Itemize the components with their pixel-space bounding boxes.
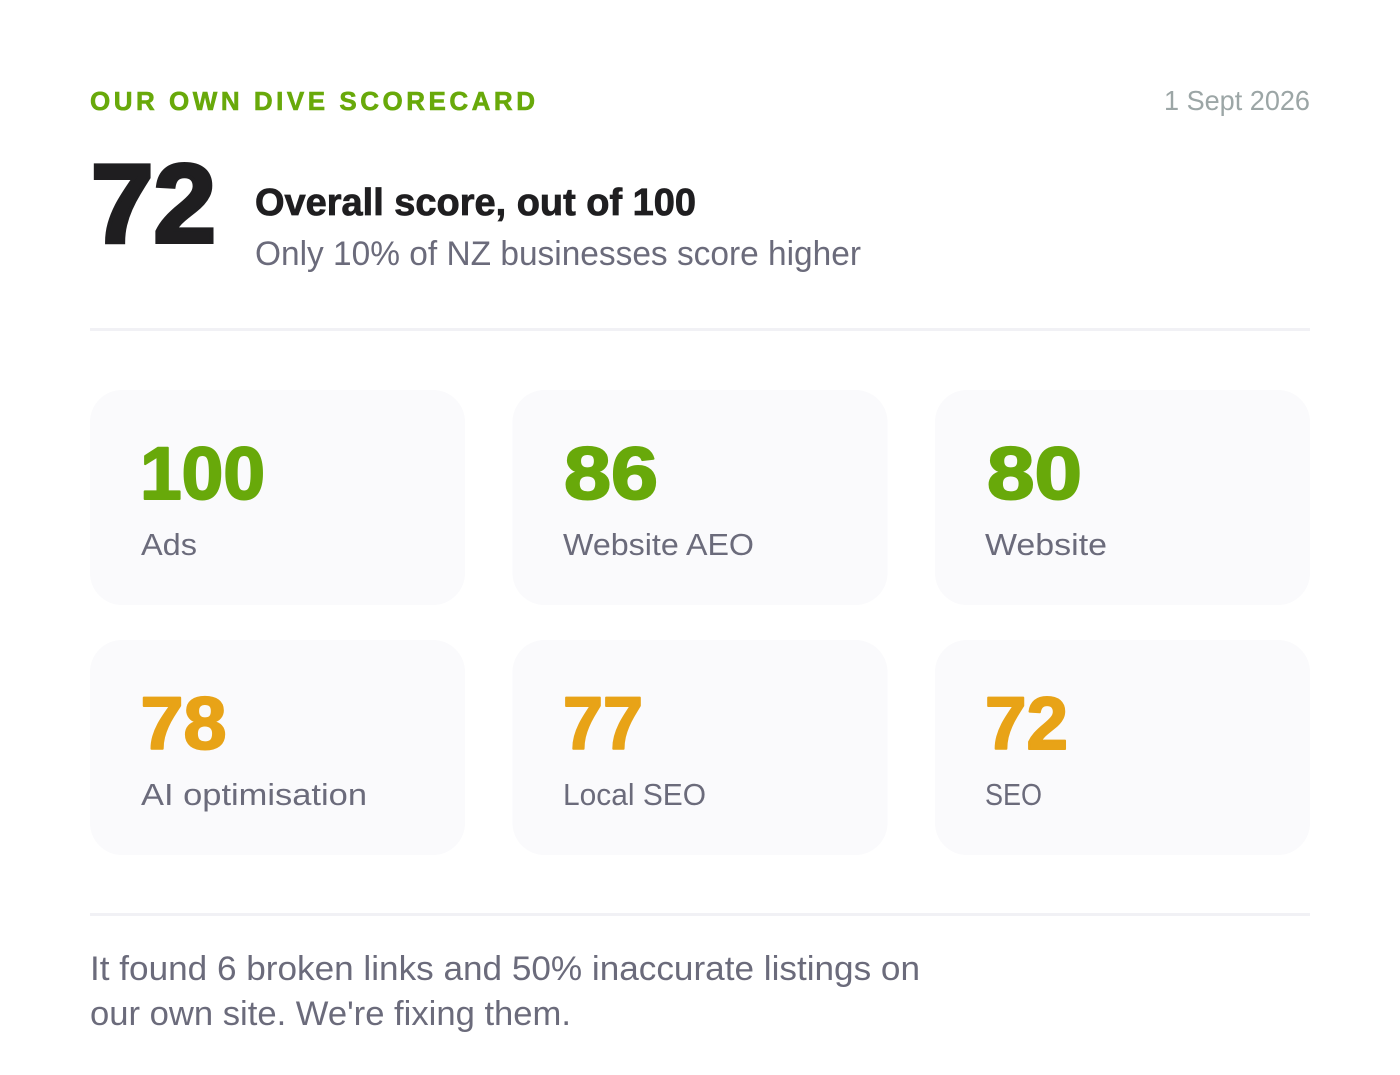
card: SEO — [935, 640, 1310, 855]
score: 78: 78 — [140, 682, 226, 765]
footer note: our own site. We're fixing them. — [90, 995, 571, 1033]
score: 72: 72 — [985, 682, 1068, 765]
date: 1 Sept 2026 — [1164, 85, 1310, 116]
label: Local SEO: Local SEO — [563, 777, 706, 812]
label: Ads: Ads — [141, 527, 197, 562]
overall score subtitle: Only 10% of NZ businesses score higher — [255, 235, 861, 273]
footer note: It found 6 broken links and 50% inaccurate listings on — [90, 950, 920, 988]
score: 77: 77 — [563, 682, 643, 765]
card: AI optimisation — [90, 640, 465, 855]
footer note — [90, 950, 920, 1033]
eyebrow heading: OUR OWN DIVE SCORECARD — [90, 86, 535, 116]
label: Website: Website — [985, 527, 1107, 562]
card: Ads — [90, 390, 465, 605]
score: 100: 100 — [140, 432, 265, 515]
score: 80: 80 — [987, 432, 1082, 515]
overall score title: Overall score, out of 100 — [255, 182, 696, 224]
label: Website AEO: Website AEO — [563, 527, 754, 562]
card: Website AEO — [512, 390, 888, 605]
score: 86: 86 — [564, 432, 658, 515]
label: SEO: SEO — [985, 777, 1042, 812]
overall score number: 72 — [91, 142, 216, 266]
label: AI optimisation: AI optimisation — [141, 777, 367, 812]
card: Website — [935, 390, 1310, 605]
card: Local SEO — [512, 640, 888, 855]
